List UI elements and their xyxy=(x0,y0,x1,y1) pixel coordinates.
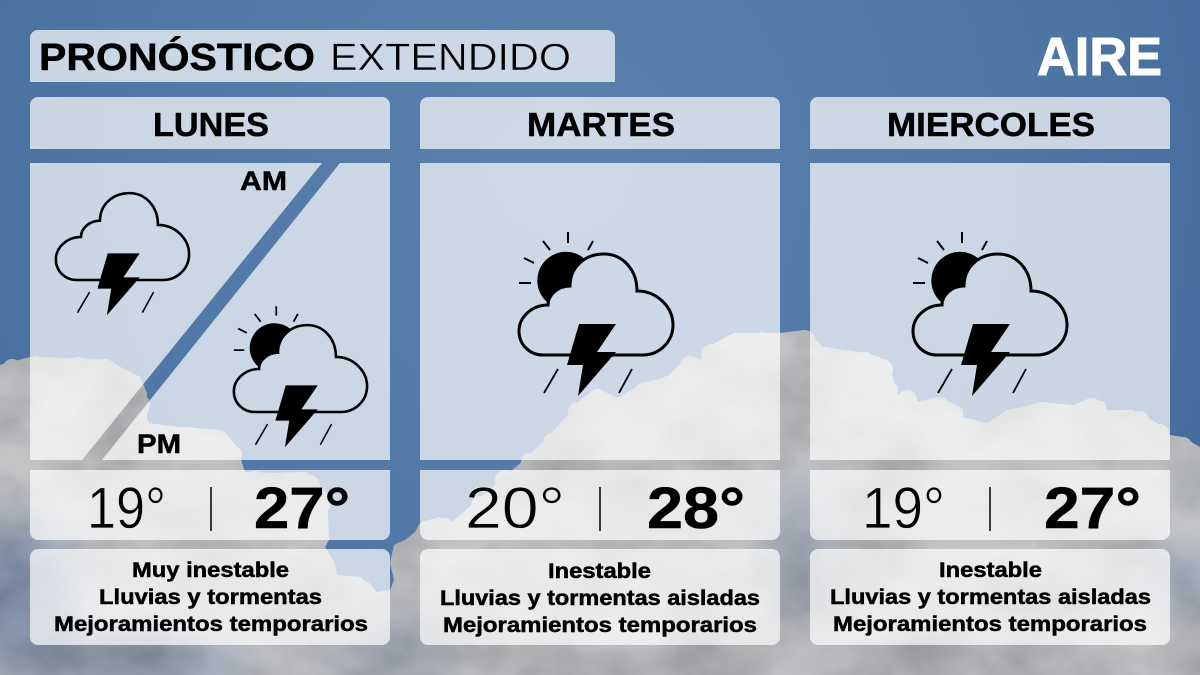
miercoles heading xyxy=(810,97,1170,149)
icon: storm cloud with sun xyxy=(913,232,1067,396)
PM half panel xyxy=(102,163,390,460)
title text: PRONÓSTICO xyxy=(39,35,315,79)
miercoles description: Mejoramientos temporarios xyxy=(833,613,1147,636)
martes heading: MARTES xyxy=(527,106,675,143)
background: clouds xyxy=(0,320,1200,675)
title bar xyxy=(30,30,615,82)
lunes description: Mejoramientos temporarios xyxy=(54,613,368,636)
lunes temperatures: 27° xyxy=(254,476,350,541)
panel: miercoles xyxy=(810,97,1170,645)
miercoles description: Lluvias y tormentas aisladas xyxy=(830,586,1151,609)
martes description: Lluvias y tormentas aisladas xyxy=(440,587,760,610)
title text: EXTENDIDO xyxy=(330,37,571,79)
miercoles icon panel xyxy=(810,163,1170,460)
martes temperatures xyxy=(420,470,780,541)
AM half panel xyxy=(30,163,322,460)
martes description xyxy=(420,549,780,645)
miercoles description: Inestable xyxy=(939,559,1042,582)
lunes heading: LUNES xyxy=(153,106,269,143)
lunes description xyxy=(30,549,390,645)
lunes heading xyxy=(30,97,390,149)
miercoles description xyxy=(810,549,1170,645)
logo: AIRE: AIRE xyxy=(1037,27,1162,87)
icon: storm cloud with sun xyxy=(519,232,673,396)
miercoles temperatures: 19° xyxy=(862,476,945,541)
miercoles temperatures xyxy=(810,470,1170,541)
martes description: Inestable xyxy=(548,560,651,583)
lunes temperatures: 19° xyxy=(87,476,166,541)
icon: storm cloud with sun PM xyxy=(234,306,367,447)
martes heading xyxy=(420,97,780,149)
martes temperatures: 28° xyxy=(647,476,745,541)
panel: lunes xyxy=(30,97,390,645)
lunes temperatures xyxy=(30,470,390,541)
panel: martes xyxy=(420,97,780,645)
martes icon panel xyxy=(420,163,780,460)
icon: storm cloud AM xyxy=(56,193,189,315)
lunes description: Muy inestable xyxy=(132,559,289,582)
miercoles heading: MIERCOLES xyxy=(887,106,1095,143)
PM label: PM xyxy=(137,429,181,459)
martes description: Mejoramientos temporarios xyxy=(443,614,757,637)
miercoles temperatures: 27° xyxy=(1044,476,1141,541)
martes temperatures: 20° xyxy=(465,476,565,541)
lunes description: Lluvias y tormentas xyxy=(99,586,322,609)
AM label: AM xyxy=(240,166,287,196)
